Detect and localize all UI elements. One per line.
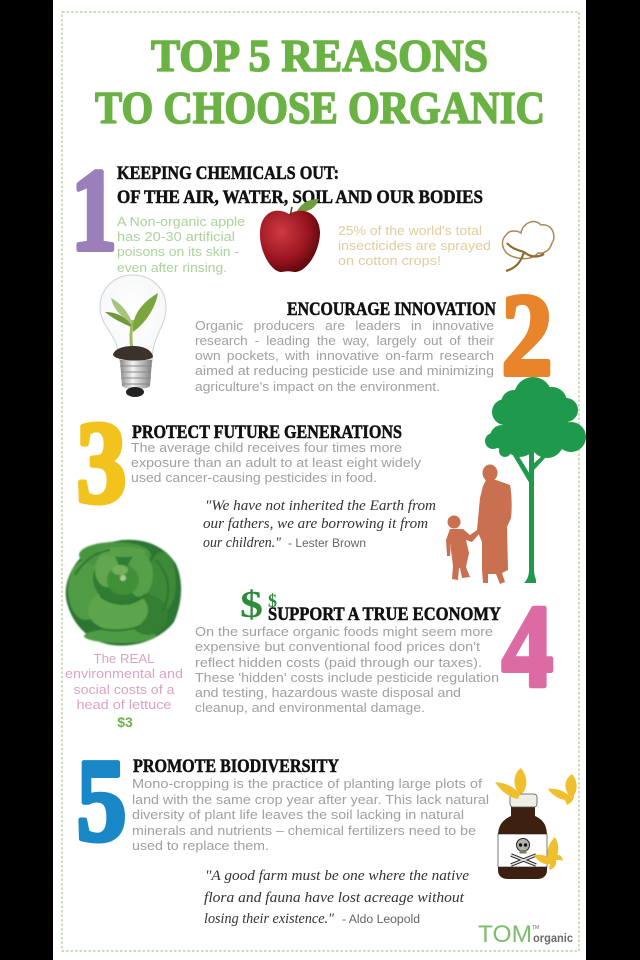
quote: Lester Brown: "We have not inherited the Earth from [205,498,436,514]
body text 5: minerals and nutrients – chemical fertilizers need to be [132,824,476,838]
quote: Aldo Leopold: "A good farm must be one where the native [205,868,469,884]
body text 5: used to replace them. [132,839,269,853]
cotton text: insecticides are sprayed [338,239,491,253]
number 2: 2 [502,270,552,400]
logo: TOM organic: organic [533,931,573,945]
body text 2: own pockets, with innovative on-farm research [195,349,494,363]
body text 4 [195,625,499,715]
body text 2: Organic producers are leaders in innovative [195,319,494,333]
body text 4: cleanup, and environmental damage. [195,701,425,715]
lettuce caption: The REAL [94,652,155,666]
icon: butterfly 1 [495,768,526,799]
body text 5: diversity of plant life leaves the soil lacking in natural [132,808,464,822]
body text 2: agriculture's impact on the environment. [195,380,440,394]
icon: apple [260,199,320,272]
body text 4: These 'hidden' costs include pesticide regulation [195,671,499,685]
quote: Aldo Leopold: flora and fauna have lost acreage without [204,890,465,906]
number 5: 5 [76,735,126,866]
number 1: 1 [71,144,117,276]
cotton text: 25% of the world's total [338,224,482,238]
icon: dollar signs [240,584,277,626]
lettuce caption [65,652,183,712]
logo: TOM organic: TOM [478,921,532,948]
icon: poison bottle [498,794,547,879]
cotton text: on cotton crops! [338,254,441,268]
body text 2: research - leading the way, largely out of their [195,334,494,348]
lettuce cost: $3 [117,714,133,730]
heading 1: KEEPING CHEMICALS OUT: [117,163,339,184]
body text 5: land with the same crop year after year. This lack natural [132,793,489,807]
section 1: keeping chemicals out [71,144,554,276]
logo: TOM organic [478,921,573,948]
apple text [117,215,245,275]
body text 3 [131,441,422,485]
body text 3: The average child receives four times more [131,441,402,455]
body text 4: expensive but conventional food prices don't [195,640,481,654]
section 5: promote biodiversity [76,735,577,948]
lettuce caption: head of lettuce [76,698,172,712]
body text 5: Mono-cropping is the practice of planting large plots of [132,777,483,791]
title: TO CHOOSE ORGANIC [95,82,545,133]
icon: light bulb with plant [100,275,166,397]
logo: TOM organic: TM [532,925,539,931]
body text 5 [132,777,489,853]
body text 2 [195,319,494,394]
apple text: even after rinsing. [117,261,227,275]
quote: Lester Brown: our children." [203,535,282,551]
apple text: A Non-organic apple [117,215,245,229]
cotton text [338,224,491,268]
section 2: encourage innovation [100,270,552,400]
section 3: protect future generations [76,377,586,584]
title: TOP 5 REASONS [151,30,488,81]
body text 2: aimed at reducing pesticide use and minimizing [195,364,494,378]
quote: Aldo Leopold [204,868,469,927]
icon: cotton [503,221,554,271]
dashed border [62,12,579,951]
apple text: has 20-30 artificial [117,230,235,244]
number 4: 4 [502,580,553,712]
icon: butterfly 3 [534,837,563,870]
body text 3: used cancer-causing pesticides in food. [131,471,377,485]
icon: dollar signs: $ [240,584,263,626]
heading 4: SUPPORT A TRUE ECONOMY [268,604,501,625]
heading 3: PROTECT FUTURE GENERATIONS [132,422,402,443]
body text 3: exposure than an adult to at least eight widely [131,456,422,470]
icon: adult and child silhouette [446,464,512,584]
heading 5: PROMOTE BIODIVERSITY [133,756,339,777]
body text 4: and testing, hazardous waste disposal and [195,686,461,700]
quote: Aldo Leopold: - Aldo Leopold [342,914,420,926]
heading 2: ENCOURAGE INNOVATION [287,299,496,320]
icon: tree [485,377,586,583]
icon: dollar signs: $ [268,591,277,612]
icon: lettuce [66,540,181,646]
title [95,30,545,133]
number 3: 3 [76,397,126,528]
body text 4: reflect hidden costs (paid through our taxes). [195,656,482,670]
section 4: support a true economy [65,540,553,730]
icon: butterfly 2 [548,774,577,805]
body text 4: On the surface organic foods might seem more [195,625,493,639]
apple text: poisons on its skin - [117,245,239,259]
quote: Lester Brown [203,498,436,551]
lettuce caption: environmental and [65,667,183,681]
heading 1 [117,163,483,208]
lettuce caption: social costs of a [74,683,175,697]
quote: Aldo Leopold: losing their existence." [204,911,335,927]
quote: Lester Brown: - Lester Brown [288,538,366,550]
heading 1: OF THE AIR, WATER, SOIL AND OUR BODIES [117,187,483,208]
quote: Lester Brown: our fathers, we are borrowing it from [203,516,428,532]
